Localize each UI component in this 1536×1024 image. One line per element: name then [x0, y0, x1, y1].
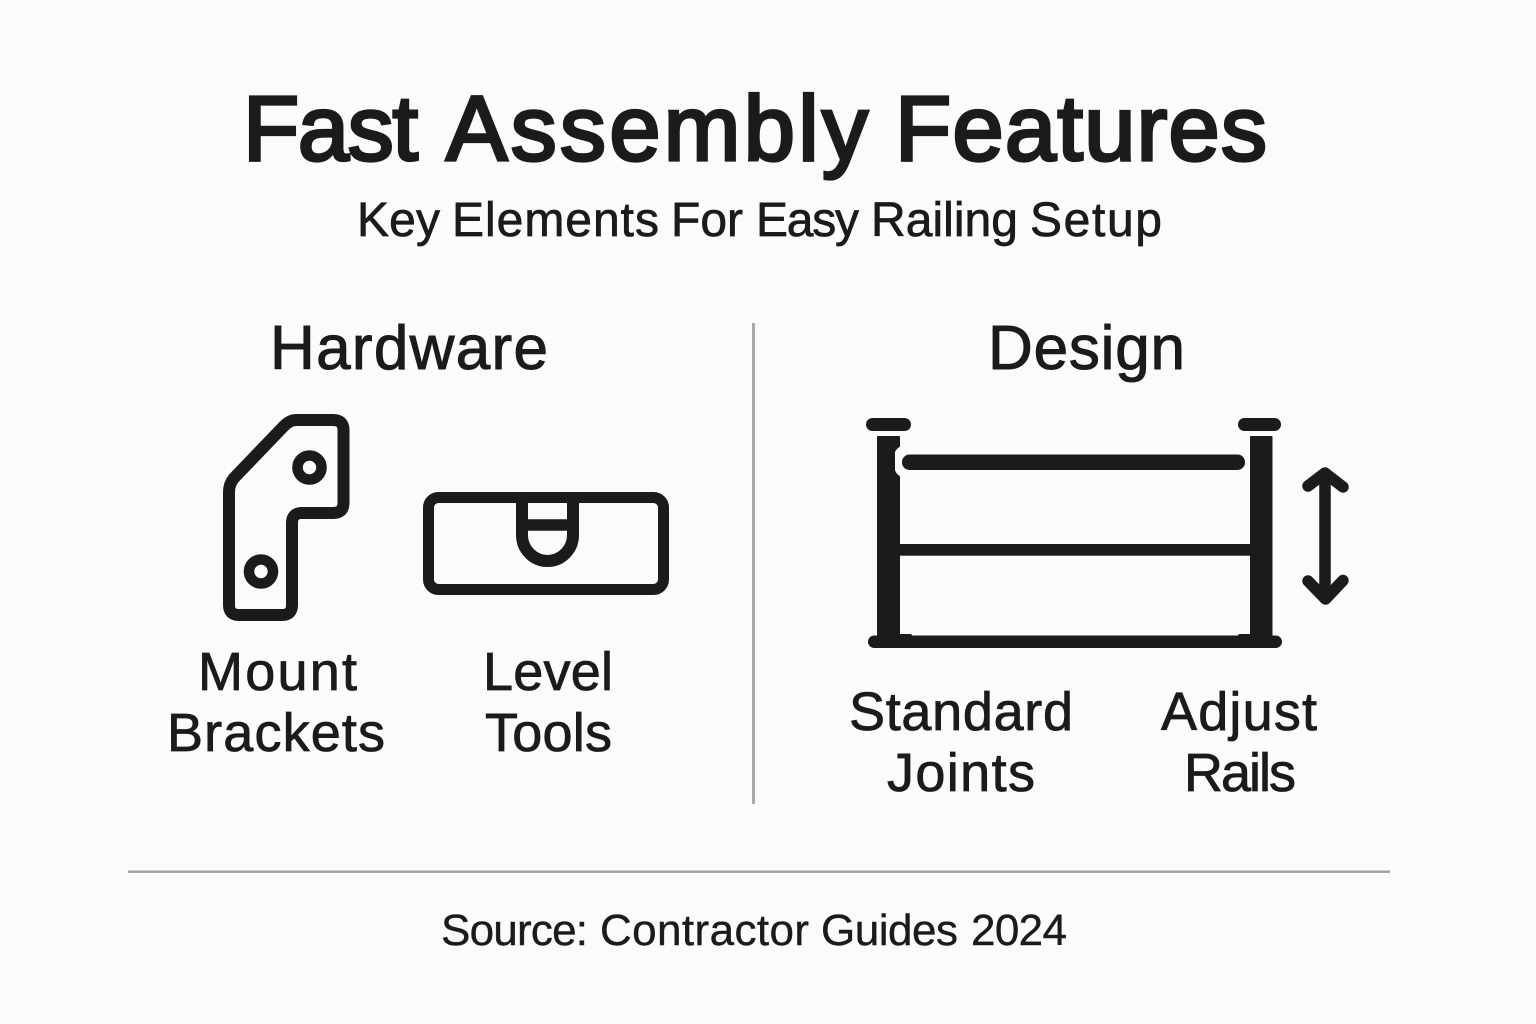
title: Fast	[243, 78, 418, 180]
icon: level tool	[428, 498, 664, 590]
label: Adjust Rails: Rails	[1184, 743, 1296, 803]
label: Standard Joints	[849, 682, 1073, 803]
subtitle: Easy	[756, 194, 859, 247]
label: Mount Brackets	[167, 642, 385, 763]
source note: Contractor	[600, 906, 809, 955]
label: Standard Joints: Standard	[849, 682, 1073, 742]
label: Standard Joints: Joints	[887, 743, 1035, 803]
footer divider	[128, 870, 1390, 873]
center divider	[752, 323, 755, 804]
label: Level Tools: Tools	[485, 703, 612, 763]
label: Level Tools	[483, 642, 613, 763]
source note: Source:	[441, 906, 588, 955]
label: Adjust Rails: Adjust	[1161, 682, 1317, 742]
icon: railing	[866, 418, 1282, 648]
subtitle: Railing	[871, 194, 1018, 247]
heading: Design: Design	[988, 314, 1185, 383]
label: Mount Brackets: Mount	[198, 642, 357, 702]
subtitle: Elements	[452, 194, 659, 247]
source note: Guides	[821, 906, 958, 955]
source note: 2024	[971, 906, 1067, 955]
subtitle: Setup	[1030, 194, 1162, 247]
panel: hardware	[167, 314, 664, 763]
panel: design	[849, 314, 1343, 803]
icon: adjust arrow	[1308, 473, 1343, 599]
subtitle: For	[671, 194, 743, 247]
label: Adjust Rails	[1161, 682, 1317, 803]
heading: Hardware: Hardware	[270, 314, 548, 383]
label: Mount Brackets: Brackets	[167, 703, 385, 763]
icon: mount bracket	[229, 420, 344, 615]
title: Features	[895, 78, 1267, 180]
subtitle: Key	[357, 194, 440, 247]
label: Level Tools: Level	[483, 642, 613, 702]
title: Assembly	[446, 78, 868, 180]
